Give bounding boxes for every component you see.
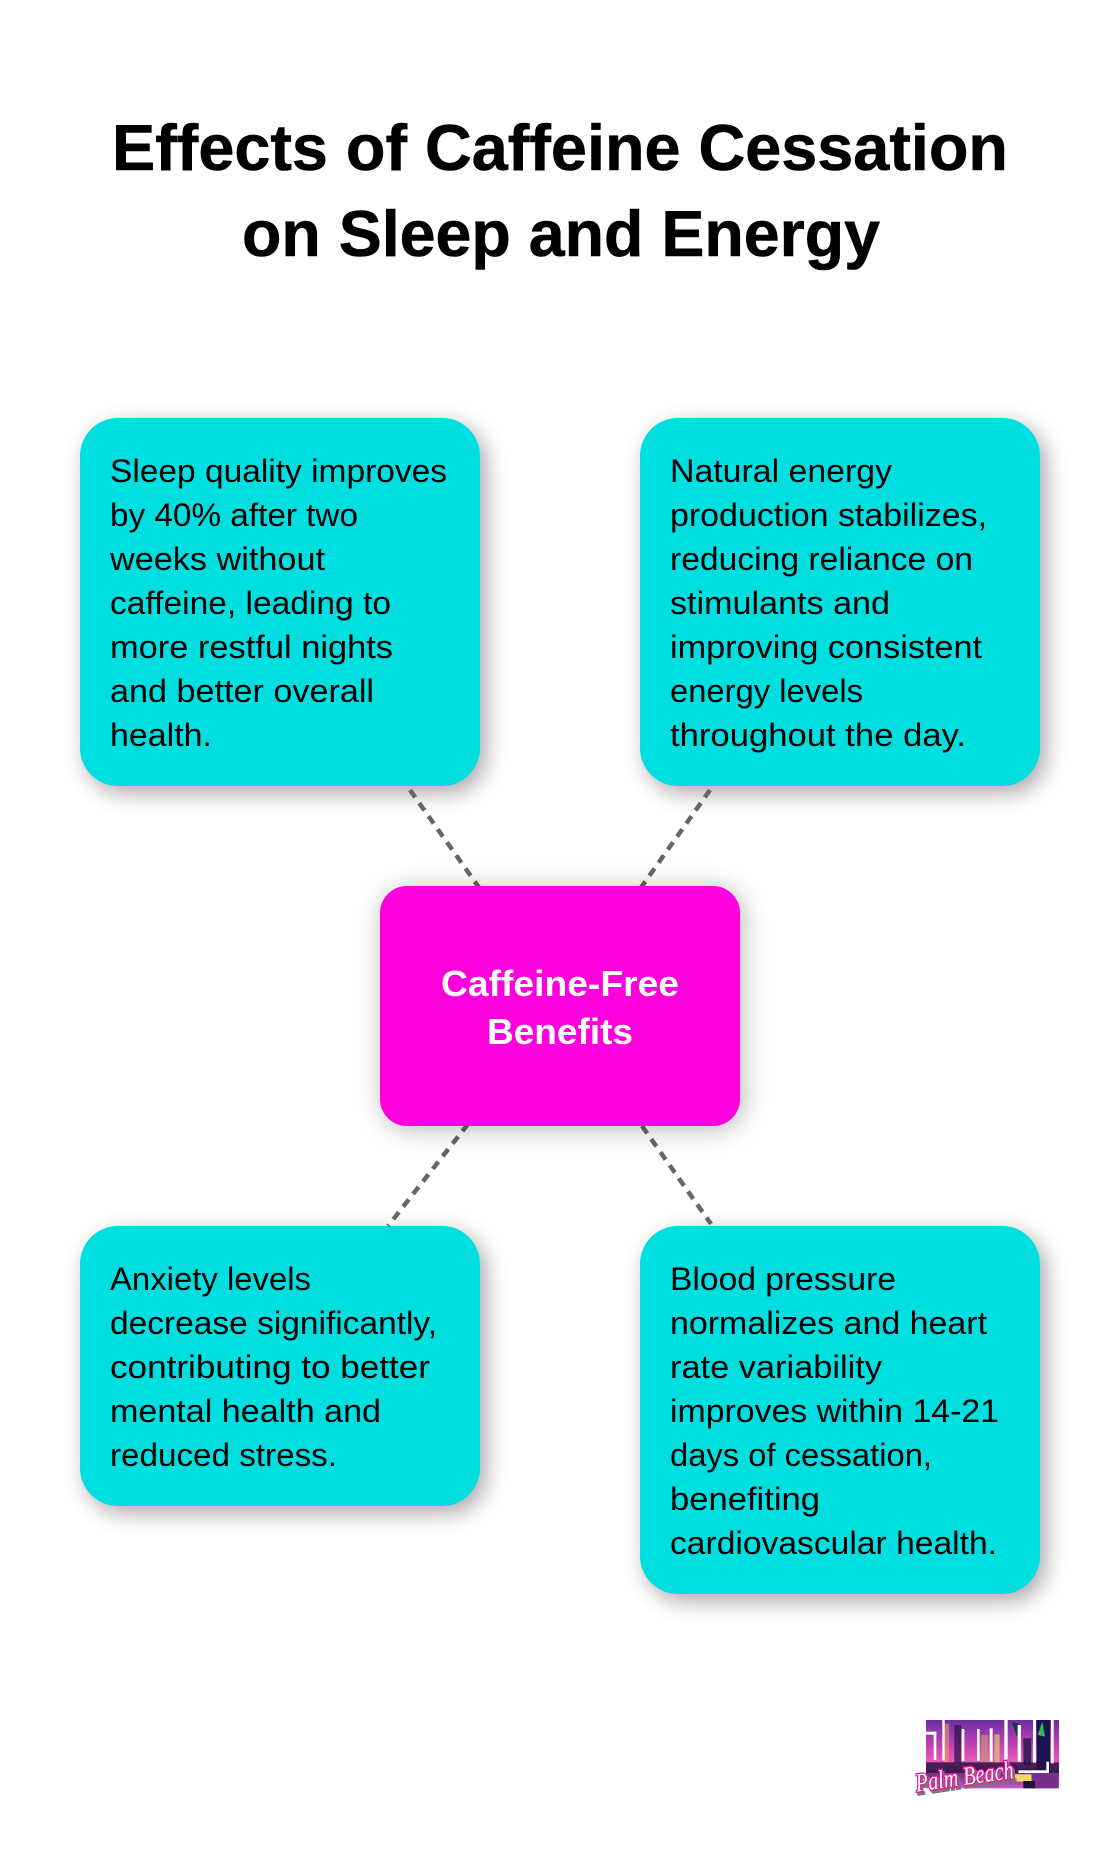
connector: bottom right [642, 1126, 711, 1224]
title [112, 111, 1008, 270]
card: blood pressure: cardiovascular health. [670, 1525, 997, 1561]
card: blood pressure: days of cessation, [670, 1437, 932, 1473]
card: anxiety: contributing to better [110, 1349, 430, 1385]
title: Effects of Caffeine Cessation [112, 111, 1008, 184]
center node: Caffeine-Free Benefits: Caffeine-Free [441, 963, 679, 1004]
center node: Caffeine-Free Benefits [380, 886, 740, 1126]
title: on Sleep and Energy [242, 197, 880, 270]
card: sleep quality: by 40% after two [110, 497, 358, 533]
card: anxiety [80, 1226, 480, 1506]
card: natural energy: energy levels [670, 673, 863, 709]
card: anxiety: Anxiety levels [110, 1261, 311, 1297]
card: sleep quality: Sleep quality improves [110, 453, 447, 489]
logo: Amity Palm Beach: Palm Beach [913, 1755, 1015, 1798]
connector: bottom left [388, 1124, 468, 1226]
card: blood pressure: Blood pressure [670, 1261, 896, 1297]
card: natural energy: stimulants and [670, 585, 890, 621]
logo: Amity Palm Beach: Palm Beach [915, 1758, 1017, 1800]
card: blood pressure: benefiting [670, 1481, 820, 1517]
card: blood pressure [640, 1226, 1040, 1594]
card: natural energy: Natural energy [670, 453, 892, 489]
card: natural energy: reducing reliance on [670, 541, 973, 577]
card: sleep quality: and better overall [110, 673, 374, 709]
card: anxiety: decrease significantly, [110, 1305, 437, 1341]
connector: top left [410, 790, 480, 889]
card: sleep quality [80, 418, 480, 786]
connector: top right [640, 790, 710, 889]
center node: Caffeine-Free Benefits: Benefits [487, 1011, 633, 1052]
card: blood pressure: normalizes and heart [670, 1305, 987, 1341]
card: anxiety: mental health and [110, 1393, 381, 1429]
card: blood pressure: improves within 14-21 [670, 1393, 999, 1429]
card: sleep quality: more restful nights [110, 629, 393, 665]
card: sleep quality: health. [110, 717, 212, 753]
card: natural energy: improving consistent [670, 629, 982, 665]
card: anxiety: reduced stress. [110, 1437, 337, 1473]
card: natural energy [640, 418, 1040, 786]
card: natural energy: production stabilizes, [670, 497, 987, 533]
card: blood pressure: rate variability [670, 1349, 882, 1385]
card: sleep quality: weeks without [109, 541, 325, 577]
card: sleep quality: caffeine, leading to [110, 585, 391, 621]
logo: Amity Palm Beach [913, 1714, 1059, 1800]
letter gaps [925, 1714, 1054, 1773]
card: natural energy: throughout the day. [670, 717, 966, 753]
